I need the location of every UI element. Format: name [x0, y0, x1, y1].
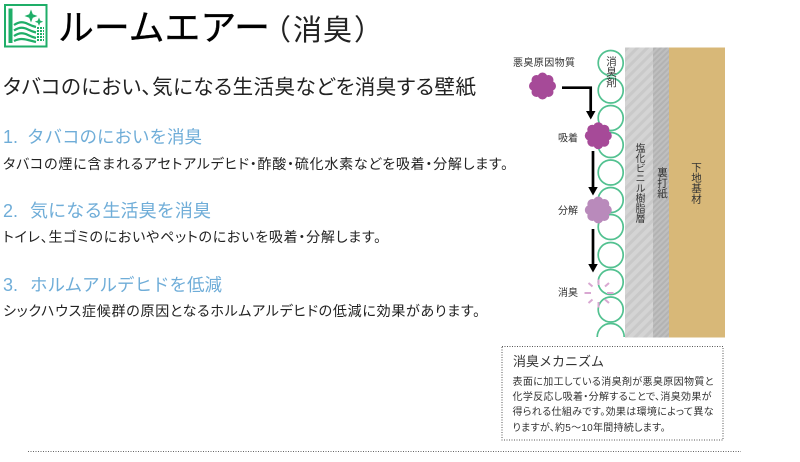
- title: [58, 7, 383, 48]
- feature 1: タバコのにおいを消臭: [27, 127, 202, 147]
- icon: decomposing molecule: [585, 196, 612, 224]
- icon: odor molecule: [529, 72, 556, 100]
- layer: base material: [669, 48, 725, 338]
- label: decomposition: 分解: [558, 204, 578, 217]
- mechanism callout: 消臭メカニズム: [513, 354, 604, 369]
- feature 3: 3.: [3, 275, 18, 295]
- layer: vinyl resin: [625, 48, 653, 338]
- mechanism callout: 得られる仕組みです。効果は環境によって異な: [512, 405, 714, 418]
- layer: base material: 下地基材: [690, 162, 702, 204]
- label: adsorption: 吸着: [558, 132, 578, 144]
- icon: room air logo: [5, 5, 46, 46]
- arrow: to decomposition: [588, 151, 598, 196]
- wall layers diagram: [625, 48, 725, 338]
- arrow: to deodorized: [588, 229, 598, 272]
- layer: vinyl resin: 塩化ビニル樹脂層: [633, 142, 645, 224]
- layer: backing paper: [653, 48, 669, 338]
- feature 3: ホルムアルデヒドを低減: [30, 275, 222, 295]
- mechanism callout: 化学反応し吸着・分解することで、消臭効果が: [512, 390, 712, 403]
- layer: backing paper: 裏打紙: [656, 166, 668, 199]
- arrow: to adsorption: [562, 88, 596, 120]
- feature 2: 気になる生活臭を消臭: [30, 201, 211, 221]
- feature 2: 2.: [3, 201, 18, 221]
- deodorant particles: [597, 50, 624, 350]
- feature 1: タバコの煙に含まれるアセトアルデヒド・酢酸・硫化水素などを吸着・分解します。: [3, 156, 508, 172]
- feature 3: [3, 275, 480, 319]
- icon: adsorbed molecule: [585, 122, 612, 149]
- feature 2: [3, 201, 381, 245]
- mechanism callout: 表面に加工している消臭剤が悪臭原因物質と: [512, 375, 714, 388]
- icon: dispersal burst: [584, 280, 614, 308]
- title: ルームエアー: [58, 7, 270, 48]
- label: deodorized: 消臭: [558, 286, 578, 299]
- mechanism callout: [502, 346, 723, 440]
- subtitle: タバコのにおい、気になる生活臭などを消臭する壁紙: [3, 76, 476, 99]
- label: deodorant: 消臭剤: [605, 55, 617, 88]
- mechanism callout: りますが、約5～10年間持続します。: [512, 421, 666, 434]
- feature 1: [3, 127, 508, 172]
- feature 2: トイレ、生ゴミのにおいやペットのにおいを吸着・分解します。: [3, 229, 381, 245]
- label: odor source: 悪臭原因物質: [513, 56, 575, 69]
- feature 3: シックハウス症候群の原因となるホルムアルデヒドの低減に効果があります。: [3, 303, 480, 319]
- feature 1: 1.: [3, 127, 18, 147]
- title: （消臭）: [262, 14, 383, 47]
